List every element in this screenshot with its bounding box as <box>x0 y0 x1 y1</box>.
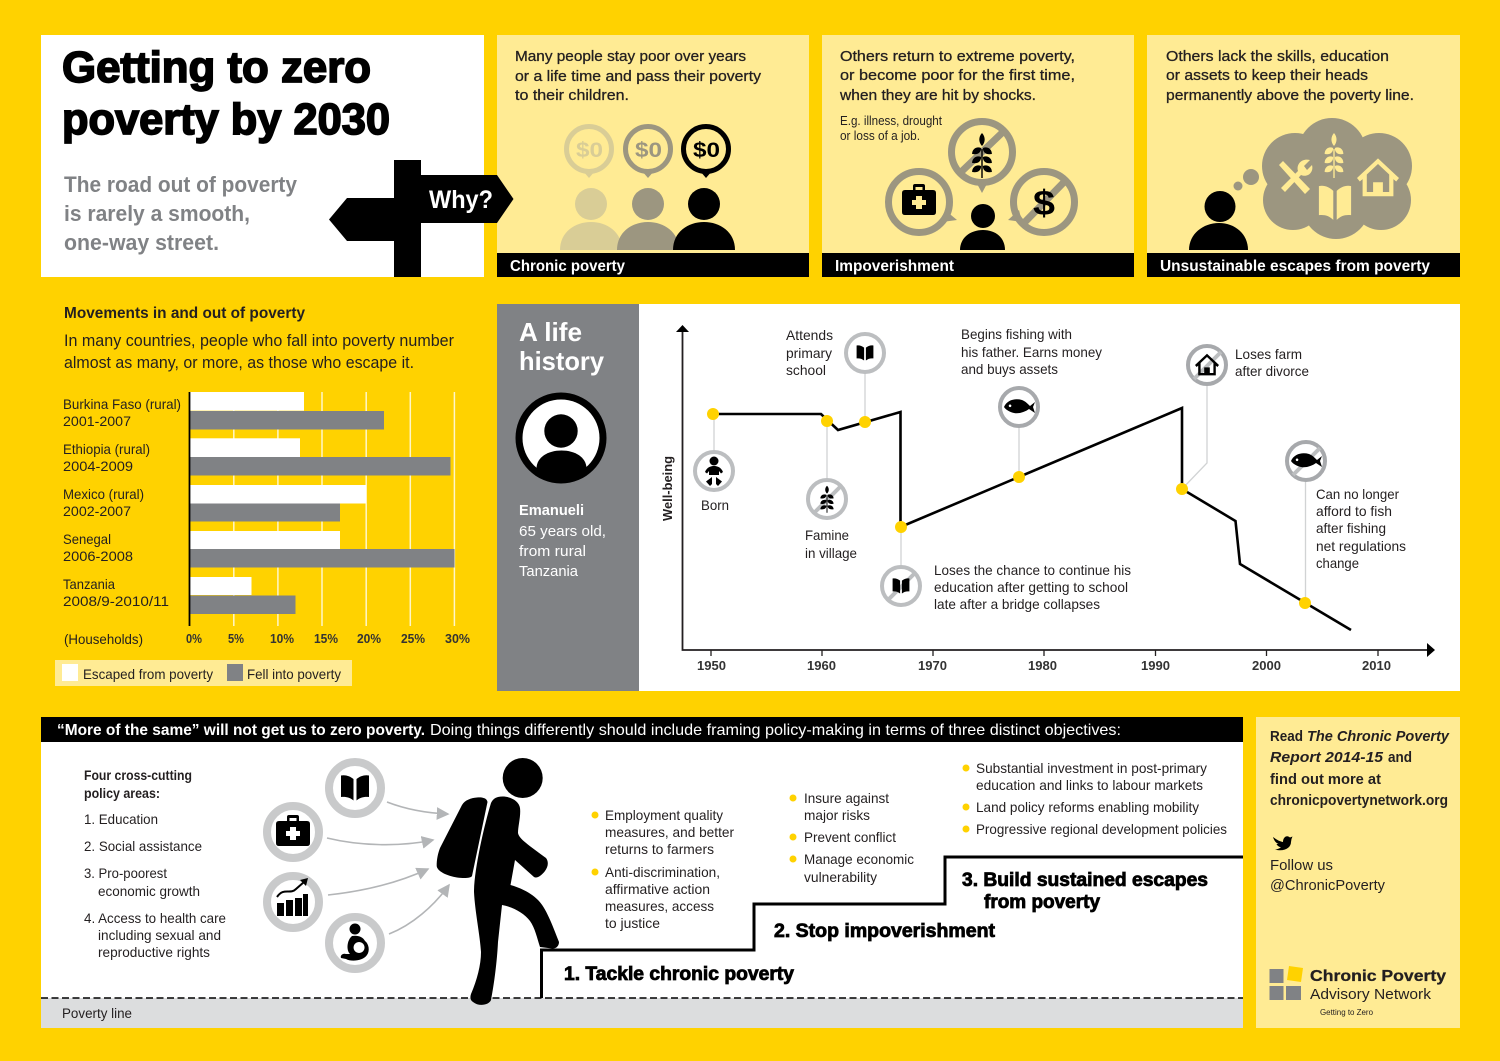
event: attends primary school <box>786 327 884 378</box>
bar chart: Burkina Faso (rural) <box>63 396 181 412</box>
logo: chronic poverty advisory network: Advisory Network <box>1310 986 1432 1003</box>
icon: shocks around a person <box>888 122 1074 250</box>
profile: Emanueli: 65 years old, <box>519 523 606 540</box>
legend: Fell into poverty <box>247 666 341 682</box>
unsustainable escapes text: Others lack the skills, education <box>1166 48 1389 65</box>
bar chart: Tanzania <box>63 576 115 592</box>
event: can no longer fish <box>1287 442 1406 571</box>
objective 1: tackle chronic poverty: affirmative action <box>605 881 710 897</box>
line chart: well-being over time <box>660 325 1435 673</box>
movements description: In many countries, people who fall into poverty number <box>64 332 454 350</box>
heading bar: more of the same: Doing things differently should include framing policy-making in terms of three distinct objectives: <box>430 722 1121 739</box>
subtitle: is rarely a smooth, <box>64 201 250 226</box>
objective 3: build sustained escapes: from poverty <box>984 892 1100 913</box>
objective 1: tackle chronic poverty: measures, access <box>605 898 714 914</box>
bar chart: 20% <box>357 632 381 646</box>
objective 2: stop impoverishment: vulnerability <box>804 869 877 885</box>
panel: impoverishment <box>822 35 1134 277</box>
axis labels: 1970 <box>918 659 947 673</box>
text: read the report <box>1270 728 1450 809</box>
event: begins fishing: and buys assets <box>961 361 1058 377</box>
logo: chronic poverty advisory network: Chronic Poverty <box>1310 968 1446 985</box>
text: read the report: and <box>1388 749 1412 766</box>
subtitle: one-way street. <box>64 230 219 255</box>
bar chart: (Households) <box>64 631 143 647</box>
heading: movements: Movements in and out of poverty <box>64 305 305 322</box>
axis labels: 2010 <box>1362 659 1391 673</box>
event: can no longer fish: afford to fish <box>1316 503 1392 519</box>
unsustainable escapes text <box>1166 48 1414 104</box>
bar chart: 10% <box>270 632 294 646</box>
chronic poverty text <box>515 48 762 104</box>
event: loses education <box>882 562 1131 612</box>
axis labels: 1960 <box>807 659 836 673</box>
logo: chronic poverty advisory network <box>1270 966 1446 1017</box>
subtitle <box>64 172 298 255</box>
event: begins fishing: Begins fishing with <box>961 326 1072 342</box>
bar chart: 2002-2007 <box>63 503 131 519</box>
icon: walking person with backpack <box>437 758 559 1005</box>
icon: shocks around a person: $ <box>1033 184 1055 223</box>
panel: unsustainable escapes <box>1147 35 1460 277</box>
text: read the report: Report 2014-15 <box>1270 749 1384 766</box>
icon: three generations with zero dollars <box>560 126 735 250</box>
subtitle: The road out of poverty <box>64 172 298 197</box>
panel: objectives <box>41 717 1243 1028</box>
text: policy areas: economic growth <box>98 883 200 899</box>
objective 2: stop impoverishment: Prevent conflict <box>804 829 896 845</box>
event: loses education: education after getting to school <box>934 579 1128 595</box>
heading bar: more of the same: “More of the same” will not get us to zero poverty. <box>57 722 425 739</box>
chronic poverty text: to their children. <box>515 87 629 104</box>
objective 3: build sustained escapes: Land policy reforms enabling mobility <box>976 799 1199 815</box>
panel: read more <box>1256 717 1460 1028</box>
heading: a life history: history <box>519 346 605 376</box>
text: follow us: @ChronicPoverty <box>1270 877 1385 894</box>
objective 1: tackle chronic poverty: Employment quality <box>605 807 723 823</box>
event: born <box>695 452 733 513</box>
legend <box>55 660 352 686</box>
text: policy areas: 3. Pro-poorest <box>84 865 167 881</box>
objective 1: tackle chronic poverty: 1. Tackle chronic poverty <box>564 964 794 985</box>
text: read the report: chronicpovertynetwork.org <box>1270 792 1448 809</box>
event: attends primary school: Attends <box>786 327 833 343</box>
event: attends primary school: school <box>786 362 826 378</box>
bar chart: 2006-2008 <box>63 548 133 564</box>
impoverishment text <box>839 48 1075 143</box>
bar chart: 30% <box>445 632 470 646</box>
bar chart: 0% <box>186 632 202 646</box>
movements description: almost as many, or more, as those who escape it. <box>64 354 414 372</box>
text: policy areas: including sexual and <box>98 927 221 943</box>
objective 1: tackle chronic poverty: measures, and better <box>605 824 734 840</box>
unsustainable escapes text: or assets to keep their heads <box>1166 67 1368 84</box>
bar chart: 2008/9-2010/11 <box>63 593 169 609</box>
event: famine in village: in village <box>805 545 857 561</box>
heading: title: poverty by 2030 <box>62 95 390 144</box>
event: loses farm: after divorce <box>1235 363 1309 379</box>
text: policy areas: reproductive rights <box>98 944 210 960</box>
label: chronic poverty: Chronic poverty <box>510 258 625 275</box>
text: policy areas: 4. Access to health care <box>84 910 226 926</box>
event: can no longer fish: Can no longer <box>1316 486 1399 502</box>
event: begins fishing <box>961 326 1102 426</box>
axis labels: Well-being <box>660 456 675 521</box>
axis labels: 1980 <box>1028 659 1057 673</box>
staircase <box>542 857 1243 998</box>
heading: a life history <box>519 317 605 376</box>
event: famine in village: Famine <box>805 527 849 543</box>
panel: movements in and out of poverty <box>55 305 470 686</box>
profile: Emanueli: Emanueli <box>519 502 584 519</box>
icon: person thinking of skills and assets <box>1189 118 1412 250</box>
text: read the report: Read <box>1270 728 1303 745</box>
icon: signpost with why <box>329 160 514 277</box>
objective 2: stop impoverishment <box>774 790 996 942</box>
objective 3: build sustained escapes: education and links to labour markets <box>976 777 1203 793</box>
text: read the report: find out more at <box>1270 771 1381 788</box>
axis labels: 1950 <box>697 659 726 673</box>
objective 3: build sustained escapes <box>962 760 1227 913</box>
profile: Emanueli: Tanzania <box>519 563 579 580</box>
heading: title: Getting to zero <box>62 43 371 92</box>
event: born: Born <box>701 497 729 513</box>
event: famine in village <box>805 480 857 561</box>
text: read the report: The Chronic Poverty <box>1307 728 1450 745</box>
axis labels: 2000 <box>1252 659 1281 673</box>
impoverishment text: when they are hit by shocks. <box>839 87 1036 104</box>
objective 1: tackle chronic poverty: returns to farmers <box>605 841 714 857</box>
movements description <box>64 332 454 372</box>
impoverishment text: or become poor for the first time, <box>840 67 1075 84</box>
text: policy areas <box>84 768 226 960</box>
profile: Emanueli: from rural <box>519 543 586 560</box>
objective 2: stop impoverishment: major risks <box>804 807 870 823</box>
icon: three generations with zero dollars: $0 <box>576 139 603 162</box>
axis labels: 1990 <box>1141 659 1170 673</box>
bar chart: 15% <box>314 632 338 646</box>
bar chart: 25% <box>401 632 425 646</box>
event: loses farm: Loses farm <box>1235 346 1302 362</box>
text: policy areas: Four cross-cutting <box>84 768 192 783</box>
objective 1: tackle chronic poverty: to justice <box>605 915 660 931</box>
event: can no longer fish: net regulations <box>1316 538 1406 554</box>
objective 3: build sustained escapes: Substantial investment in post-primary <box>976 760 1207 776</box>
text: follow us <box>1270 857 1385 894</box>
bar chart <box>63 392 470 647</box>
label: impoverishment: Impoverishment <box>835 258 955 275</box>
bar chart: 5% <box>228 632 244 646</box>
heading: a life history: A life <box>519 317 582 347</box>
label: unsustainable escapes: Unsustainable escapes from poverty <box>1160 258 1430 275</box>
event: begins fishing: his father. Earns money <box>961 344 1102 360</box>
text: policy areas: 2. Social assistance <box>84 838 202 854</box>
bar chart: 2004-2009 <box>63 458 133 474</box>
icon: twitter bird <box>1273 836 1292 850</box>
text: policy areas: 1. Education <box>84 811 158 827</box>
objective 2: stop impoverishment: 2. Stop impoverishment <box>774 921 996 942</box>
panel: chronic poverty <box>497 35 809 277</box>
bar chart: 2001-2007 <box>63 413 131 429</box>
bar chart: Senegal <box>63 531 111 547</box>
objective 3: build sustained escapes: Progressive regional development policies <box>976 821 1227 837</box>
text: follow us: Follow us <box>1270 857 1333 874</box>
label: poverty line: Poverty line <box>62 1006 132 1021</box>
text: policy areas: policy areas: <box>84 786 160 801</box>
impoverishment text: Others return to extreme poverty, <box>840 48 1075 65</box>
arrows: policy areas to walker <box>327 802 449 934</box>
objective 2: stop impoverishment: Insure against <box>804 790 889 806</box>
objective 1: tackle chronic poverty <box>564 807 794 985</box>
event: loses education: Loses the chance to continue his <box>934 562 1131 578</box>
profile: Emanueli <box>519 502 606 580</box>
icon: signpost with why: Why? <box>429 186 493 214</box>
panel: a life history <box>497 304 1460 691</box>
chronic poverty text: or a life time and pass their poverty <box>515 68 762 85</box>
panel: title <box>41 35 484 277</box>
unsustainable escapes text: permanently above the poverty line. <box>1166 87 1414 104</box>
heading bar: more of the same <box>41 717 1243 742</box>
impoverishment text: E.g. illness, drought <box>840 114 942 128</box>
axis labels <box>660 456 1391 673</box>
objective 3: build sustained escapes: 3. Build sustained escapes <box>962 870 1208 891</box>
event: attends primary school: primary <box>786 345 832 361</box>
icon: three generations with zero dollars: $0 <box>635 139 662 162</box>
objective 2: stop impoverishment: Manage economic <box>804 851 914 867</box>
logo: chronic poverty advisory network: Getting to Zero <box>1320 1007 1373 1017</box>
icons: policy areas <box>267 762 381 969</box>
legend: Escaped from poverty <box>83 666 213 682</box>
event: loses education: late after a bridge collapses <box>934 596 1100 612</box>
event: can no longer fish: after fishing <box>1316 520 1386 536</box>
bar chart: Mexico (rural) <box>63 486 144 502</box>
bar chart: Ethiopia (rural) <box>63 441 150 457</box>
event: loses farm <box>1188 346 1309 384</box>
objective 1: tackle chronic poverty: Anti-discrimination, <box>605 864 720 880</box>
icon: Emanueli portrait <box>516 392 606 484</box>
event: can no longer fish: change <box>1316 555 1359 571</box>
heading: title <box>62 43 390 144</box>
chronic poverty text: Many people stay poor over years <box>515 48 746 65</box>
icon: three generations with zero dollars: $0 <box>693 139 720 162</box>
impoverishment text: or loss of a job. <box>840 129 920 143</box>
